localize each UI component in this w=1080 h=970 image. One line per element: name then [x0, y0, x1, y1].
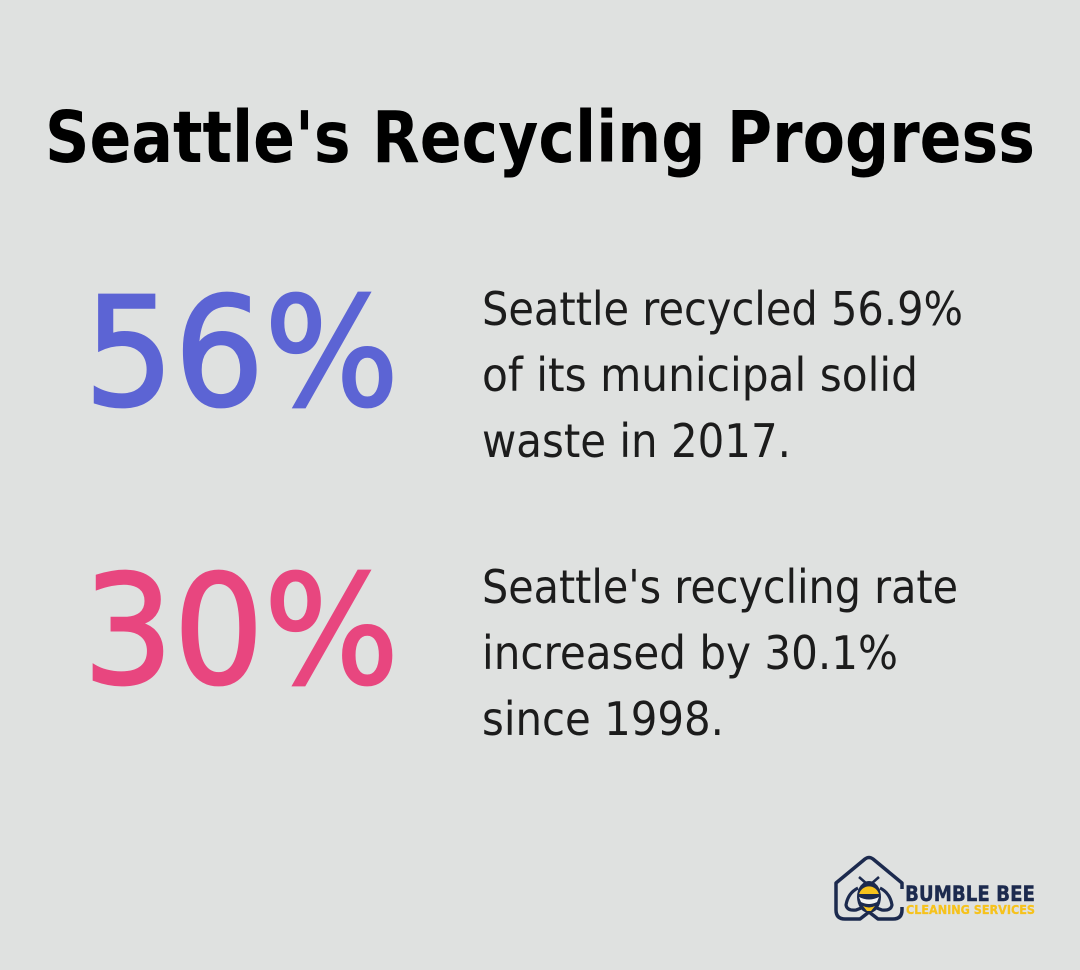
logo: Bumble Bee Cleaning Services	[836, 858, 1035, 919]
text: 30% description: increased by 30.1%	[482, 626, 898, 680]
icon: house outline	[836, 858, 902, 919]
text: 56% description	[482, 282, 963, 468]
stat: 56%: 56%	[84, 265, 399, 441]
text: 56% description: Seattle recycled 56.9%	[482, 282, 963, 336]
text: 30% description: since 1998.	[482, 692, 724, 746]
icon: bee	[846, 877, 892, 913]
text: 30% description	[482, 560, 958, 746]
logo wordmark: BUMBLE BEE	[905, 882, 1035, 906]
text: 30% description: Seattle's recycling rate	[482, 560, 958, 614]
text: 56% description: of its municipal solid	[482, 348, 918, 402]
stat: 30%: 30%	[83, 543, 399, 719]
logo tagline: CLEANING SERVICES	[906, 902, 1035, 917]
text: 56% description: waste in 2017.	[482, 414, 791, 468]
